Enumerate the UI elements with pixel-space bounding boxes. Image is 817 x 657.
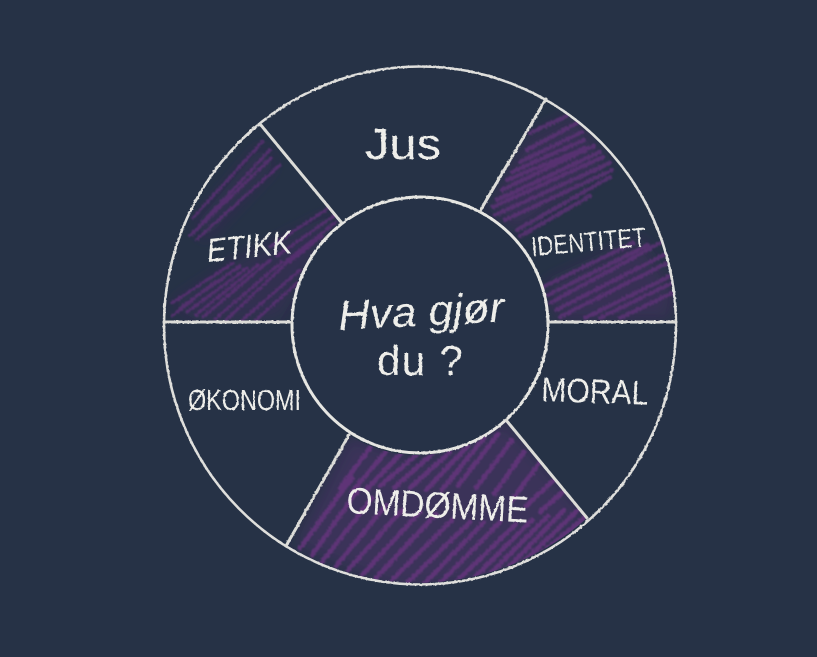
label: ETIKK: ETIKK (205, 223, 295, 269)
label: IDENTITET: IDENTITET (530, 222, 647, 262)
label: Jus: Jus (365, 120, 441, 169)
panel: omdømme hatching (295, 420, 590, 590)
wheel diagram (164, 66, 676, 590)
panel: identitet hatching (490, 113, 675, 320)
center question (337, 283, 507, 384)
divider lines (164, 99, 676, 546)
outer ring (164, 66, 676, 584)
labels (188, 120, 649, 531)
inner circle (292, 197, 548, 453)
center question: du ? (377, 337, 463, 384)
label: ØKONOMI: ØKONOMI (188, 385, 301, 417)
label: OMDØMME: OMDØMME (346, 480, 529, 531)
center question: Hva gjør (337, 283, 507, 339)
panel: etikk hatching (170, 141, 336, 322)
label: MORAL: MORAL (541, 371, 649, 413)
